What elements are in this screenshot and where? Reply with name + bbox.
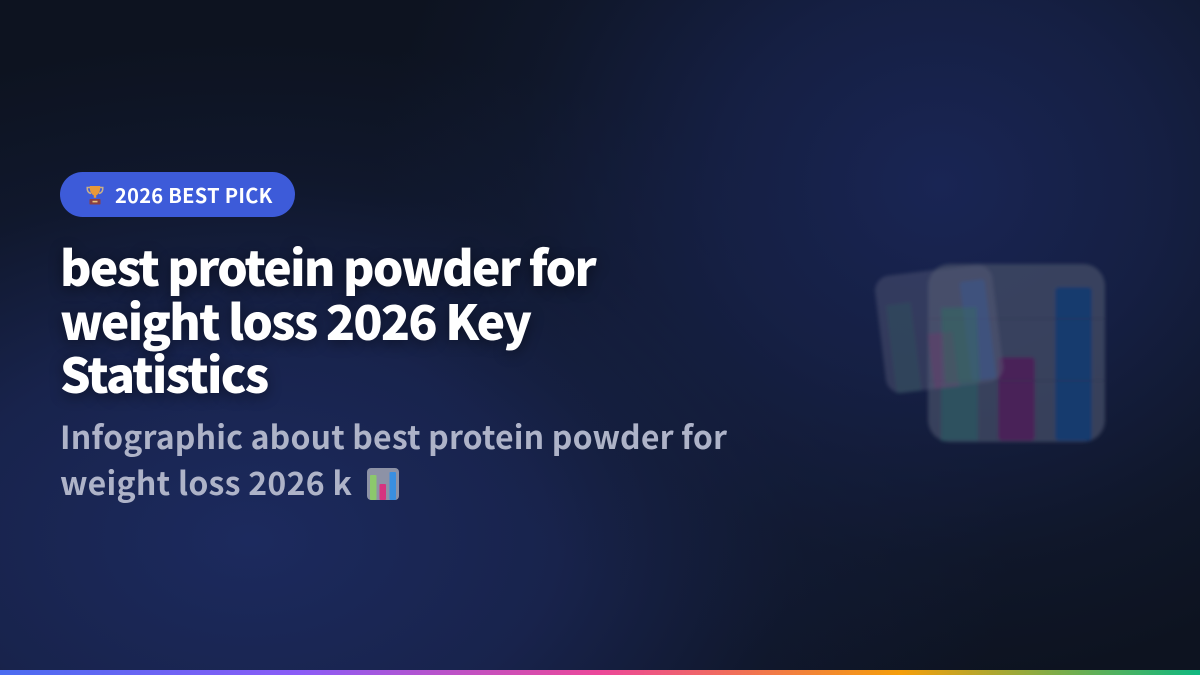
icon: trophy bbox=[86, 186, 104, 204]
subtitle bbox=[60, 413, 727, 505]
badge bbox=[60, 172, 295, 217]
large chart card bbox=[928, 264, 1105, 442]
rainbow bottom bar bbox=[0, 670, 1200, 675]
title: best protein powder for bbox=[60, 230, 595, 300]
decorative icon: blurred bar charts bbox=[874, 262, 1106, 444]
subtitle: weight loss 2026 k bbox=[60, 459, 352, 505]
subtitle: Infographic about best protein powder for bbox=[60, 413, 727, 459]
small tilted chart card bbox=[873, 263, 1005, 395]
badge label: 2026 BEST PICK bbox=[115, 180, 273, 209]
icon: bar chart emoji bbox=[367, 468, 399, 500]
title: Statistics bbox=[60, 337, 268, 407]
title: weight loss 2026 Key bbox=[60, 284, 530, 354]
title bbox=[60, 230, 597, 407]
